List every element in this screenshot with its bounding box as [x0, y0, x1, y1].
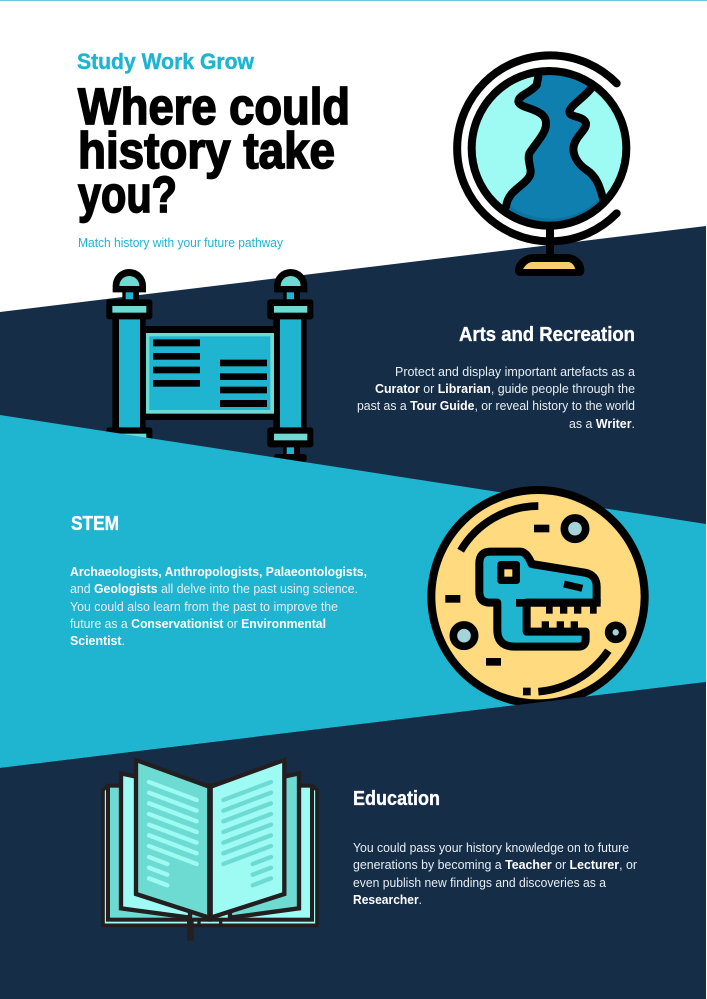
panel: arts and recreation text [357, 324, 635, 431]
body text: Curator or Librarian, guide people through the [375, 382, 635, 396]
heading: STEM [71, 513, 119, 535]
background: teal band [0, 415, 706, 768]
icon: open book [103, 760, 317, 941]
body text: You could also learn from the past to improve the [70, 600, 338, 614]
eyebrow: Study Work Grow [77, 49, 255, 74]
title: you? [78, 166, 177, 223]
body text [353, 841, 637, 907]
panel: education text [353, 788, 637, 907]
icon: dinosaur fossil [431, 490, 645, 703]
background: navy band [0, 226, 706, 999]
body text: as a Writer. [569, 417, 635, 431]
body text [70, 565, 367, 648]
body text: You could pass your history knowledge on to future [353, 841, 629, 855]
background: lower navy band [0, 682, 706, 999]
panel: STEM text [70, 513, 367, 648]
body text: Researcher. [353, 893, 422, 907]
title: history take [78, 122, 335, 179]
heading: Arts and Recreation [459, 324, 635, 346]
icon: scroll sign [106, 269, 313, 462]
subtitle: Match history with your future pathway [78, 236, 284, 250]
icon: globe [457, 55, 637, 276]
header block [77, 49, 350, 250]
body text [357, 365, 635, 431]
title [78, 78, 350, 223]
title: Where could [78, 78, 350, 135]
body text: generations by becoming a Teacher or Lecturer, or [353, 858, 637, 872]
body text: Protect and display important artefacts as a [395, 365, 635, 379]
body text: future as a Conservationist or Environmental [70, 617, 326, 631]
body text: even publish new findings and discoveries as a [353, 876, 606, 890]
body text: Archaeologists, Anthropologists, Palaeontologists, [70, 565, 367, 579]
heading: Education [353, 788, 440, 810]
body text: and Geologists all delve into the past using science. [70, 582, 358, 596]
body text: Scientist. [70, 634, 125, 648]
body text: past as a Tour Guide, or reveal history to the world [357, 399, 635, 413]
